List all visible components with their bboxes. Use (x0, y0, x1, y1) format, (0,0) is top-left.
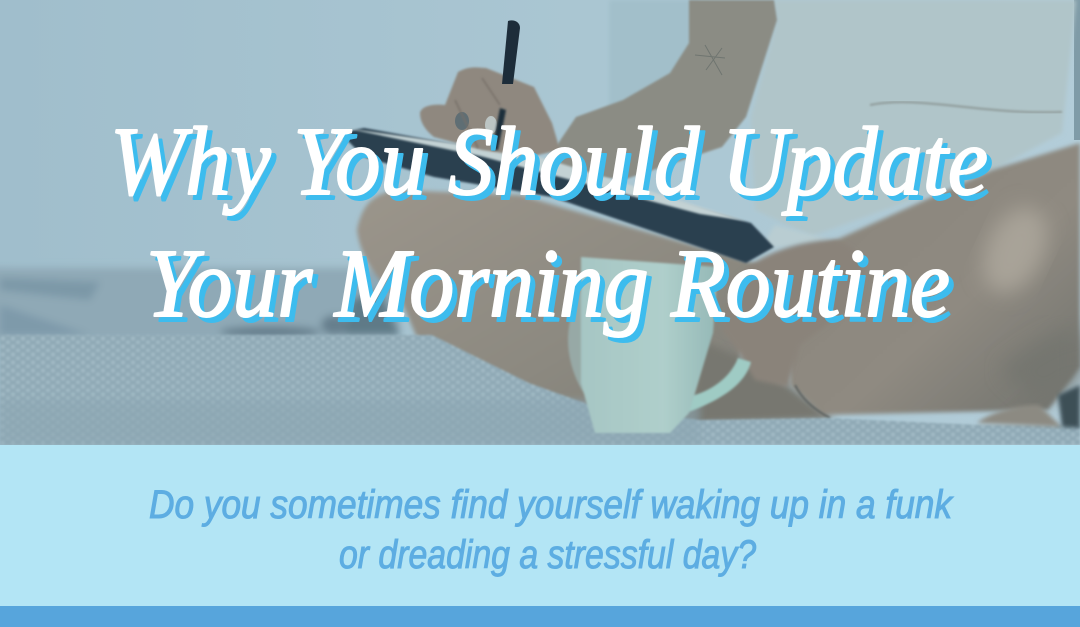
foot (977, 405, 1062, 427)
title line 1: Why You Should Update (110, 108, 988, 216)
subtitle line 2: or dreading a stressful day? (339, 533, 757, 577)
subtitle band (149, 483, 954, 577)
bottom bar (0, 606, 1080, 627)
mug (568, 257, 751, 433)
subtitle line 1: Do you sometimes find yourself waking up in a funk (149, 483, 954, 527)
pen (492, 20, 520, 150)
title line 2: Your Morning Routine (146, 230, 950, 338)
title line 2: Your Morning Routine (151, 235, 955, 343)
shirt (751, 0, 1076, 250)
writing hand (420, 67, 560, 157)
rumpled sheet (0, 268, 400, 340)
upper arm with tattoo (540, 0, 777, 180)
photo: person writing in notebook on a bed (0, 0, 1080, 445)
title line 1: Why You Should Update (115, 113, 993, 221)
knit blanket (0, 335, 1080, 445)
crossed leg (357, 190, 760, 425)
pillow background (0, 0, 1080, 445)
title (110, 108, 993, 343)
right knee (780, 143, 1080, 418)
notebook (340, 128, 774, 263)
dark lower shin behind mug (690, 340, 835, 425)
hand on mug (722, 240, 864, 387)
